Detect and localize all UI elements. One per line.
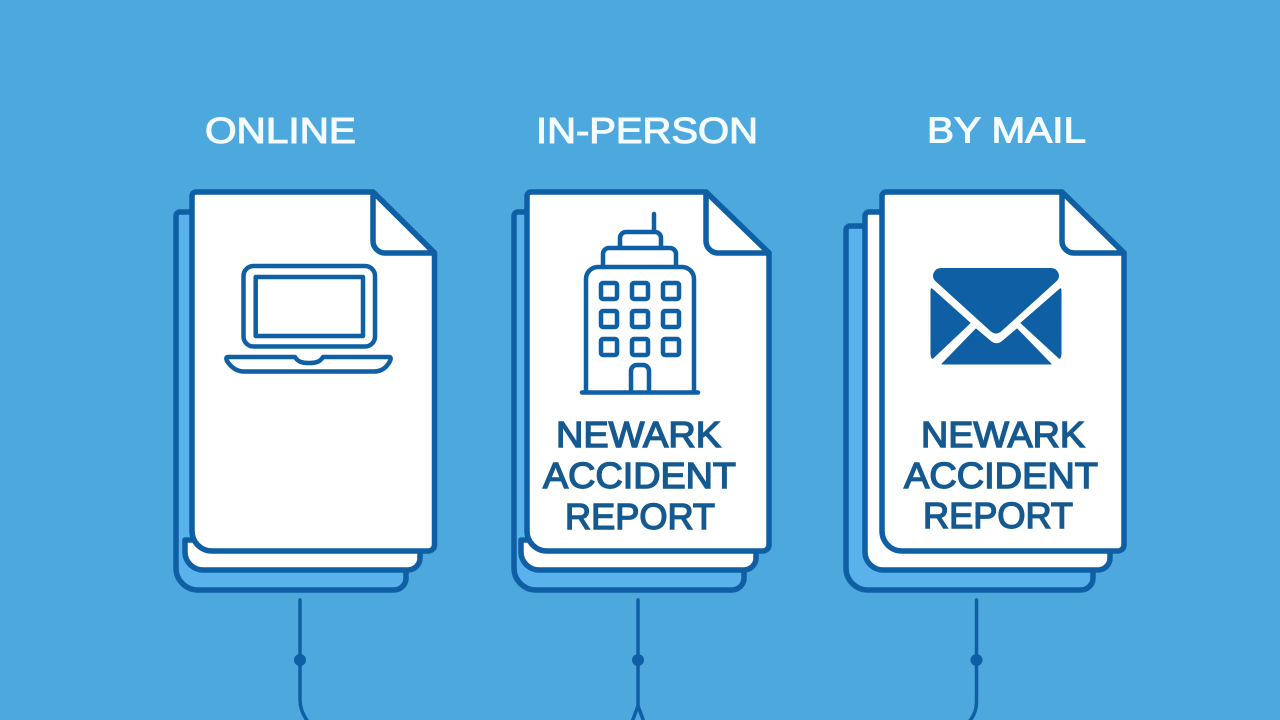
connector: online	[294, 600, 308, 720]
connector: by mail	[969, 600, 982, 720]
back sheet	[846, 226, 1093, 590]
middle sheet	[185, 540, 420, 570]
middle sheet	[521, 540, 756, 570]
panel: in-person document stack	[514, 192, 769, 590]
text: report title: ACCIDENT	[543, 455, 736, 496]
front sheet	[527, 192, 769, 551]
back sheet	[514, 212, 744, 590]
text: report title	[543, 414, 736, 537]
panel: online document stack	[176, 192, 434, 590]
page fold	[373, 192, 434, 253]
page fold	[706, 192, 769, 253]
front sheet	[192, 192, 434, 551]
text: report title: ACCIDENT	[904, 455, 1098, 496]
text: report title: REPORT	[923, 495, 1073, 536]
text: report title	[904, 414, 1098, 536]
front sheet	[882, 192, 1124, 551]
page fold	[1062, 192, 1124, 253]
icon: office building	[582, 214, 698, 392]
panel: by mail document stack	[846, 192, 1124, 590]
heading: by mail: BY MAIL	[927, 110, 1086, 150]
back sheet	[176, 212, 406, 590]
icon: laptop	[226, 266, 391, 372]
icon: envelope	[931, 268, 1061, 364]
text: report title: NEWARK	[556, 414, 721, 455]
heading: in-person: IN-PERSON	[536, 110, 758, 151]
text: report title: REPORT	[565, 496, 715, 537]
middle sheet	[865, 212, 1110, 570]
text: report title: NEWARK	[921, 414, 1085, 455]
heading: online: ONLINE	[205, 110, 356, 151]
connector: in-person	[632, 600, 644, 720]
